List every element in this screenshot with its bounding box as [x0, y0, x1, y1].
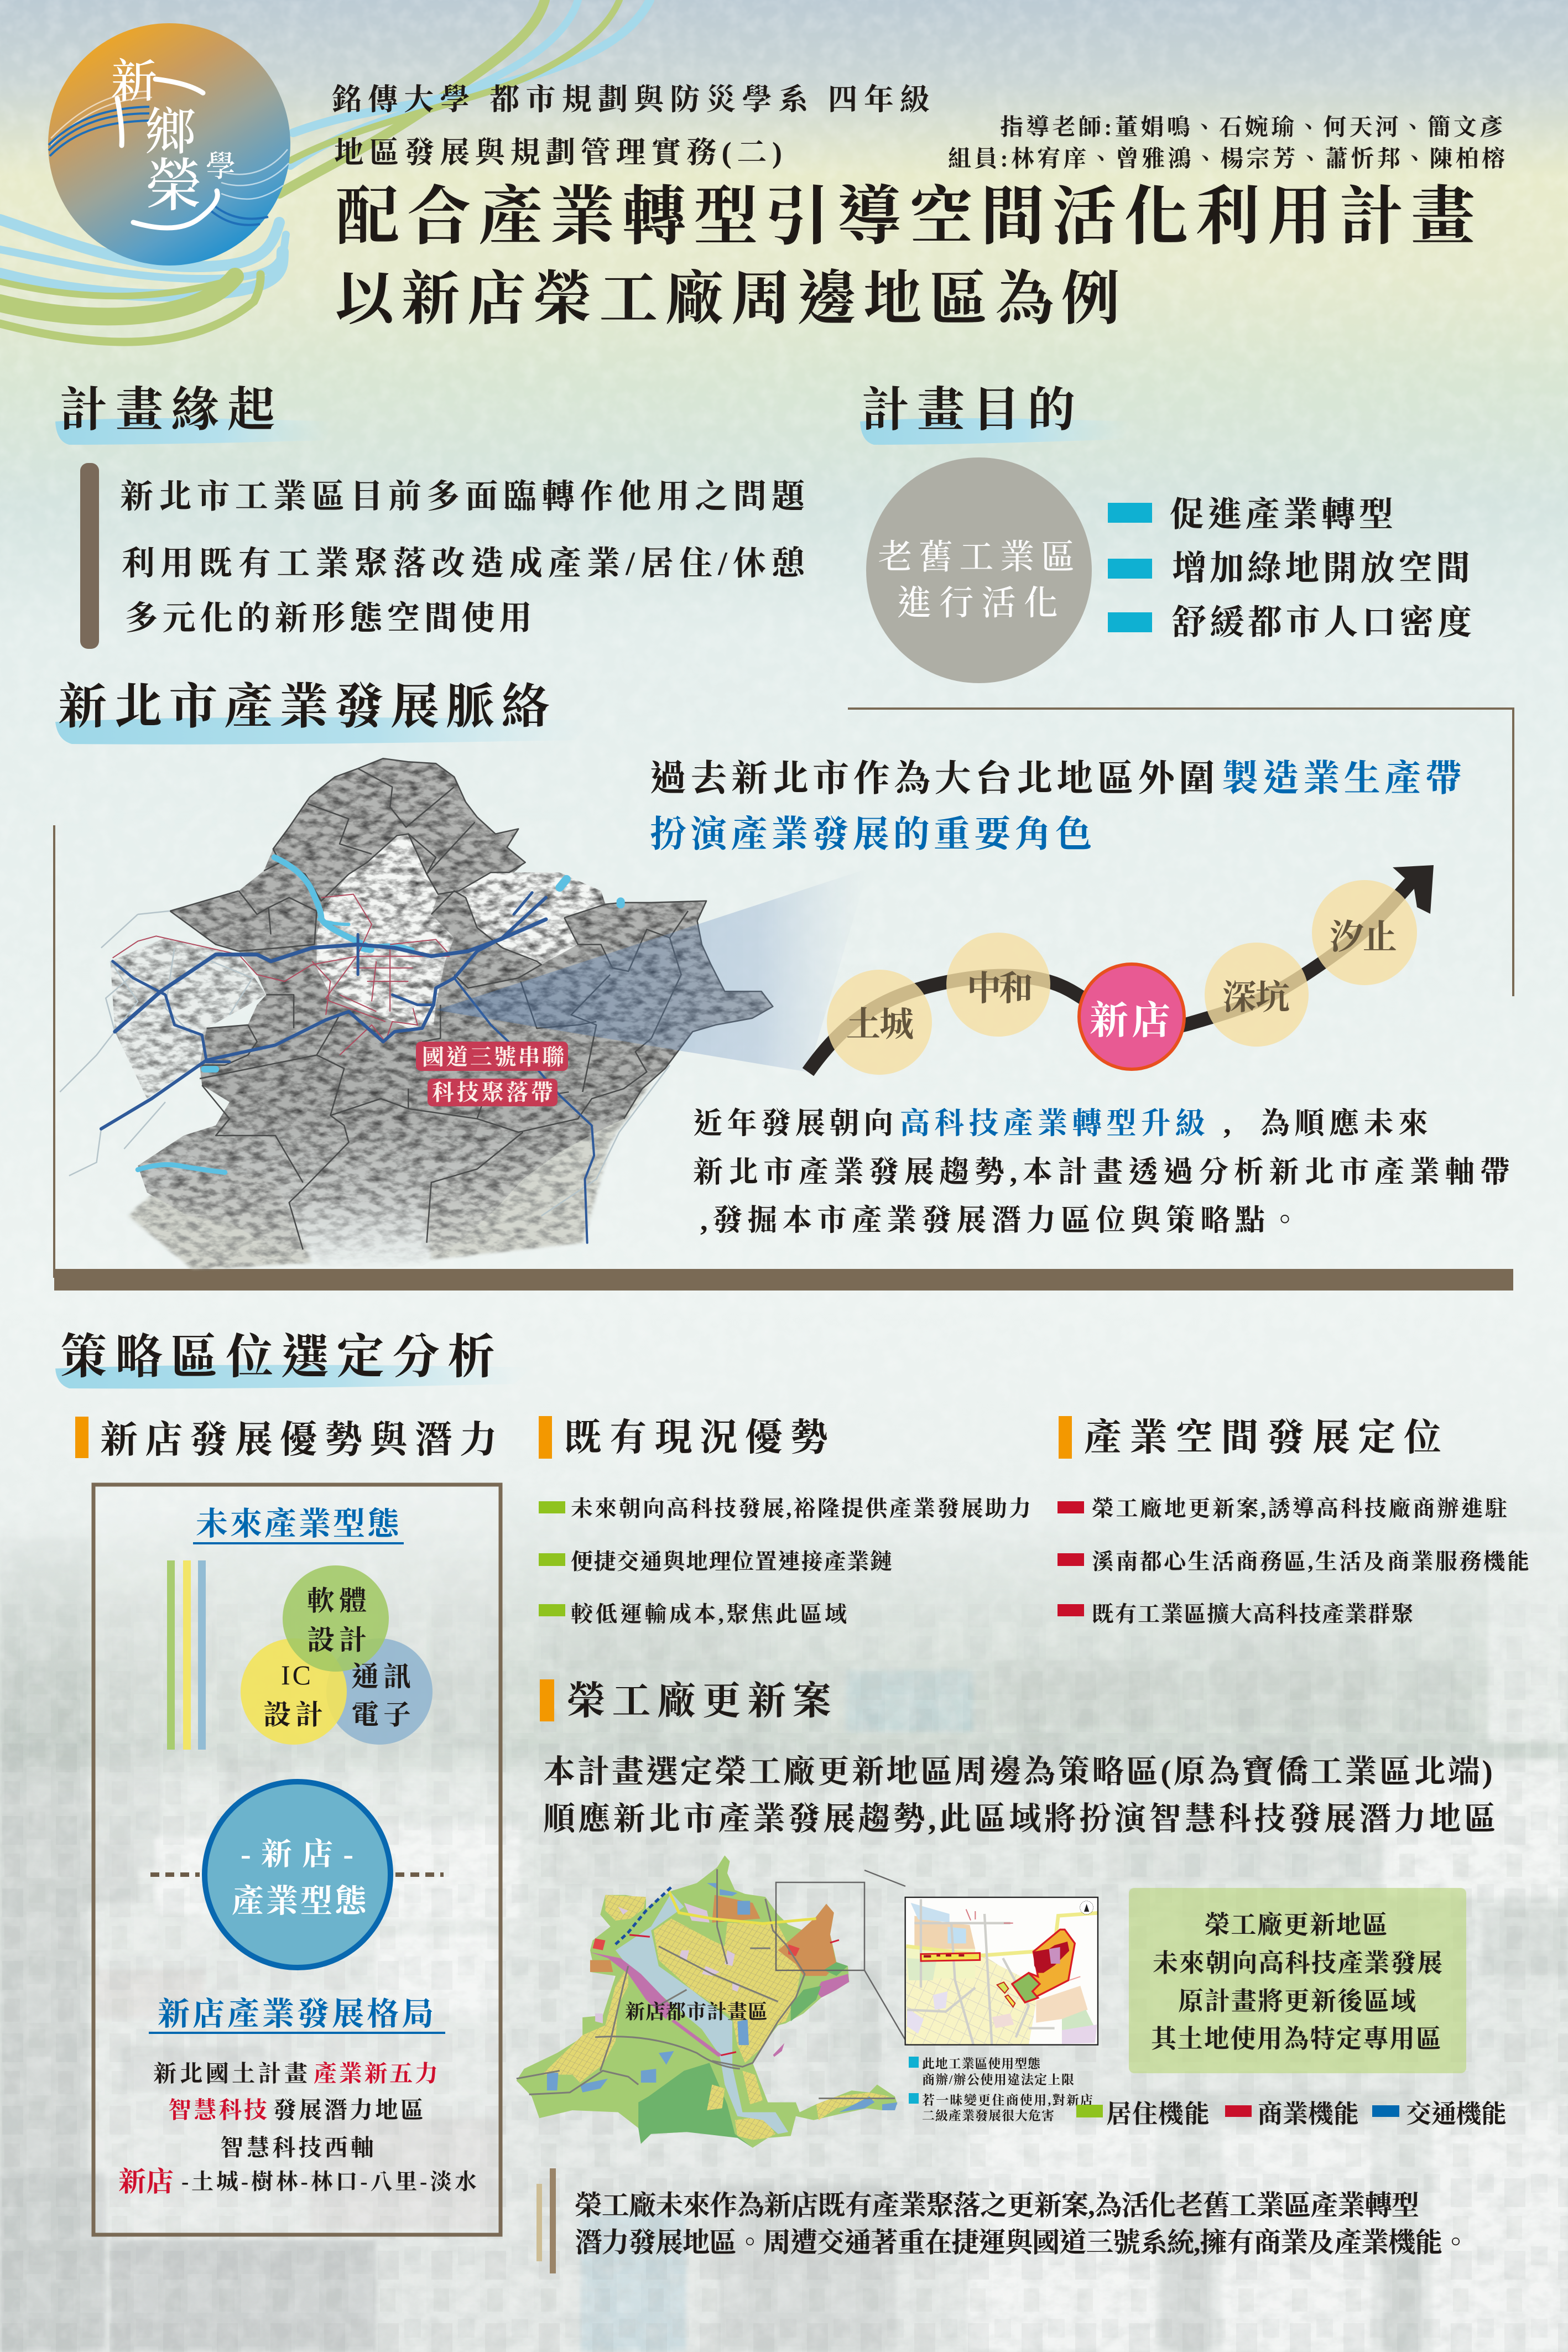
title	[335, 181, 1475, 332]
title: 以新店榮工廠周邊地區為例	[335, 267, 1120, 332]
circle: old industrial area revitalization: 老舊工業區	[878, 539, 1075, 576]
diagram: overlapping industry circles: 電子	[351, 1699, 411, 1730]
axis node: 汐止	[1312, 880, 1417, 985]
panel: background text	[80, 463, 808, 649]
dashed connector	[150, 1872, 444, 1877]
diagram: overlapping industry circles: 通訊	[351, 1661, 411, 1692]
panel: background text: 利用既有工業聚落改造成產業/居住/休憩	[122, 545, 807, 582]
diagram: overlapping industry circles: 軟體	[307, 1585, 367, 1616]
header: school and course: 銘傳大學 都市規劃與防災學系 四年級	[332, 83, 930, 116]
text: past role: 製造業生產帶	[1222, 759, 1462, 799]
axis node: 深坑	[1205, 943, 1309, 1047]
heading: 計畫目的	[860, 383, 1130, 445]
diagram: overlapping industry circles: IC	[281, 1659, 311, 1690]
axis node: 中和	[946, 933, 1050, 1037]
label: 國道三號串聯科技聚落帶	[416, 1042, 568, 1106]
axis node: 土城: 土城	[846, 1006, 914, 1044]
title: 配合產業轉型引導空間活化利用計畫	[335, 181, 1475, 253]
panel: Xindian industry	[93, 1485, 501, 2235]
notes: industrial land use: 若一昧變更住商使用,對新店	[922, 2093, 1093, 2108]
logo	[48, 23, 290, 266]
legend: functions: 商業機能	[1257, 2100, 1359, 2129]
list: existing advantages: 未來朝向高科技發展,裕隆提供產業發展助力	[571, 1496, 1031, 1521]
map inset: Rong Gong factory site	[905, 1897, 1098, 2045]
text: past role: 過去新北市作為大台北地區外圍	[650, 759, 1215, 799]
text: site selection: 本計畫選定榮工廠更新地區周邊為策略區(原為寶僑工業區北端)	[543, 1753, 1493, 1790]
circle: Xindian industry type	[205, 1782, 390, 1968]
map: Xindian urban plan	[517, 1855, 898, 2148]
arrow: industrial axis	[808, 865, 1434, 1072]
wedge: zoom projection to axis	[436, 868, 868, 1072]
circle: old industrial area revitalization: 進行活化	[897, 585, 1058, 622]
notes: industrial land use: 商辦/辦公使用違法定上限	[922, 2072, 1074, 2086]
notes: industrial land use: 此地工業區使用型態	[922, 2057, 1041, 2071]
list: spatial positioning	[1058, 1496, 1529, 1626]
header: teachers and members	[948, 114, 1505, 172]
decorative wave bands behind logo	[0, 0, 650, 342]
panel: renewal area summary: 榮工廠更新地區	[1204, 1911, 1388, 1939]
text: industrial layout details: 智慧科技西軸	[220, 2135, 374, 2161]
map: New Taipei City	[60, 758, 773, 1269]
text: past role	[650, 759, 1462, 855]
heading: 新北市產業發展脈絡: 新北市產業發展脈絡	[58, 680, 550, 735]
subheading: 新店發展優勢與潛力: 新店發展優勢與潛力	[100, 1419, 497, 1461]
text: industrial layout details	[118, 2061, 477, 2197]
panel: renewal area summary: 原計畫將更新後區域	[1178, 1987, 1416, 2016]
text: conclusion: 潛力發展地區。周遭交通著重在捷運與國道三號系統,擁有商業及產業機能。	[575, 2227, 1470, 2258]
text: industrial layout details: 新北國土計畫	[153, 2061, 308, 2087]
panel: renewal area summary	[1129, 1888, 1466, 2073]
logo: 榮	[145, 155, 202, 218]
label: 國道三號串聯科技聚落帶: 科技聚落帶	[432, 1080, 553, 1105]
legend: functions: 交通機能	[1406, 2100, 1507, 2129]
frame lines	[848, 709, 1513, 996]
decorative color bars	[167, 1560, 206, 1750]
heading: 計畫目的: 計畫目的	[862, 383, 1075, 436]
legend: functions: 居住機能	[1106, 2100, 1210, 2129]
subheading: 既有現況優勢: 既有現況優勢	[564, 1417, 828, 1459]
subheading: 產業空間發展定位: 產業空間發展定位	[1084, 1417, 1441, 1459]
logo: 新	[111, 56, 157, 107]
heading: future industry types: 未來產業型態	[196, 1506, 401, 1542]
panel: background text: 新北市工業區目前多面臨轉作他用之問題	[120, 478, 808, 515]
text: industrial layout details: 發展潛力地區	[273, 2098, 424, 2124]
text: conclusion	[573, 2190, 1470, 2258]
circle: old industrial area revitalization	[866, 457, 1092, 683]
logo: 學	[206, 150, 236, 183]
list: existing advantages: 便捷交通與地理位置連接產業鏈	[571, 1549, 892, 1574]
text: recent development: ,	[1223, 1107, 1231, 1140]
subheading: 榮工廠更新案: 榮工廠更新案	[565, 1680, 831, 1723]
list: project goals: 促進產業轉型	[1170, 496, 1393, 534]
text: recent development	[693, 1107, 1510, 1237]
header: school and course: 地區發展與規劃管理實務(二)	[334, 136, 782, 169]
header: school and course	[332, 83, 930, 169]
list: existing advantages: 較低運輸成本,聚焦此區域	[571, 1602, 847, 1626]
diagram: overlapping industry circles: 設計	[307, 1625, 367, 1656]
axis node: 深坑: 深坑	[1222, 979, 1290, 1017]
diagram: overlapping industry circles: 設計	[263, 1699, 323, 1730]
text: recent development: ,發掘本市產業發展潛力區位與策略點。	[700, 1204, 1300, 1237]
axis node: 新店: 新店	[1090, 1000, 1170, 1042]
list: project goals: 舒緩都市人口密度	[1172, 603, 1472, 642]
text: site selection	[543, 1753, 1496, 1836]
heading: 策略區位選定分析: 策略區位選定分析	[60, 1330, 495, 1383]
header: teachers and members: 指導老師:董娟鳴、石婉瑜、何天河、簡文彥	[1000, 114, 1503, 141]
text: industrial layout details: 新店	[118, 2166, 174, 2197]
list: spatial positioning: 榮工廠地更新案,誘導高科技廠商辦進駐	[1091, 1496, 1507, 1521]
zoom indicator	[776, 1870, 905, 2040]
panel: renewal area summary: 其土地使用為特定專用區	[1151, 2025, 1441, 2053]
heading: industrial layout: 新店產業發展格局	[158, 1996, 434, 2032]
circle: Xindian industry type: 產業型態	[232, 1883, 368, 1919]
list: spatial positioning: 既有工業區擴大高科技產業群聚	[1092, 1602, 1414, 1626]
axis node: 新店	[1079, 964, 1184, 1069]
text: site selection: 順應新北市產業發展趨勢,此區域將扮演智慧科技發展潛力地區	[543, 1801, 1496, 1836]
panel: renewal area summary: 未來朝向高科技產業發展	[1153, 1949, 1442, 1977]
text: industrial layout details: 智慧科技	[168, 2098, 267, 2124]
divider bar	[54, 1269, 1513, 1291]
heading: 計畫緣起	[55, 383, 332, 445]
text: industrial layout details: 產業新五力	[314, 2061, 438, 2087]
notes: industrial land use	[909, 2057, 1093, 2123]
label: plan district name: 新店都市計畫區	[625, 2001, 768, 2023]
circle: Xindian industry type: -新店-	[241, 1838, 353, 1872]
text: past role: 扮演產業發展的重要角色	[650, 814, 1092, 855]
text: recent development: 為順應未來	[1260, 1107, 1428, 1140]
header: teachers and members: 組員:林宥庠、曾雅鴻、楊宗芳、蕭忻邦、陳柏榕	[948, 146, 1505, 172]
accent bars	[536, 2168, 556, 2273]
notes: industrial land use: 二級產業發展很大危害	[922, 2109, 1054, 2123]
text: industrial layout details: -土城-樹林-林口-八里-淡水	[181, 2169, 477, 2194]
text: recent development: 高科技產業轉型升級	[900, 1107, 1205, 1140]
diagram: overlapping industry circles	[241, 1565, 433, 1745]
axis node: 土城	[827, 970, 932, 1075]
axis node: 汐止: 汐止	[1330, 919, 1397, 956]
heading: 計畫緣起: 計畫緣起	[60, 383, 275, 436]
logo: 鄉	[145, 104, 196, 160]
list: project goals: 增加綠地開放空間	[1172, 550, 1470, 587]
legend: functions	[1076, 2100, 1507, 2129]
panel: background text: 多元化的新形態空間使用	[125, 600, 532, 637]
text: recent development: 新北市產業發展趨勢,本計畫透過分析新北市產業軸帶	[693, 1156, 1510, 1189]
text: conclusion: 榮工廠未來作為新店既有產業聚落之更新案,為活化老舊工業區產業轉型	[573, 2190, 1419, 2221]
axis node: 中和: 中和	[967, 970, 1033, 1008]
label: 國道三號串聯科技聚落帶: 國道三號串聯	[422, 1044, 565, 1070]
list: spatial positioning: 溪南都心生活商務區,生活及商業服務機能	[1092, 1549, 1529, 1574]
list: project goals	[1108, 496, 1472, 642]
text: recent development: 近年發展朝向	[693, 1107, 893, 1140]
list: existing advantages	[539, 1496, 1031, 1626]
